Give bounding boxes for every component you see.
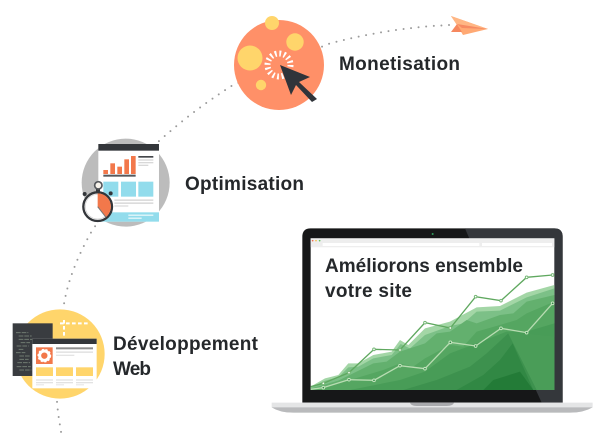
laptop base — [272, 403, 593, 413]
label: Développement Web — [113, 334, 259, 380]
screen heading: Améliorons ensemble — [325, 256, 523, 277]
label: Développement Web: Développement — [113, 334, 259, 355]
icon: optimisation report and stopwatch — [82, 139, 170, 227]
screen heading — [325, 256, 523, 302]
chart line upper — [311, 274, 554, 387]
icon: paper plane — [451, 16, 488, 35]
gear — [38, 350, 50, 362]
label: Optimisation: Optimisation — [185, 174, 304, 195]
icon: web development windows — [13, 309, 105, 399]
spinner — [268, 54, 290, 76]
icon: monetisation click circle — [234, 16, 324, 110]
chart line lower — [311, 302, 554, 389]
laptop — [272, 228, 593, 413]
laptop lid — [302, 228, 563, 403]
icon: cursor arrow — [280, 65, 317, 102]
dotted flight path — [57, 25, 449, 438]
label: Développement Web: Web — [113, 359, 151, 380]
browser bar — [311, 238, 554, 247]
laptop screen — [311, 238, 554, 390]
stopwatch — [83, 182, 113, 221]
area chart — [311, 285, 554, 390]
label: Monetisation: Monetisation — [339, 54, 460, 75]
screen heading: votre site — [325, 281, 412, 302]
